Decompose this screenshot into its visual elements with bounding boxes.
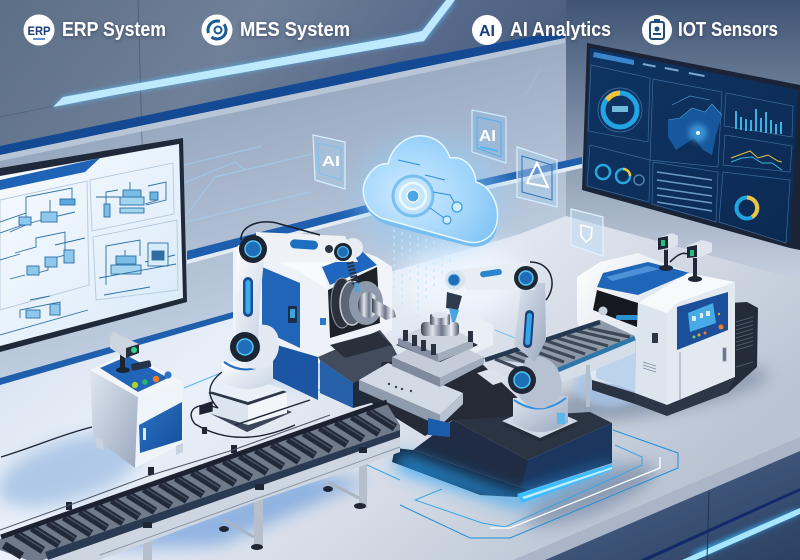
left CNC machine [233, 238, 400, 408]
rear housing [577, 253, 690, 390]
rail brackets [66, 427, 367, 528]
blue under-glow [395, 452, 615, 508]
header: ERP System: ERP [28, 24, 50, 38]
schematic panel: bottom right [93, 220, 178, 300]
cabinet top [638, 273, 735, 313]
right white column [363, 252, 392, 333]
line chart [731, 151, 782, 170]
icon: holographic cloud [363, 136, 498, 247]
right wall [566, 0, 800, 280]
panel frames [587, 65, 793, 243]
machine back body [233, 238, 392, 377]
control box with camera [90, 332, 183, 468]
cloud glow [355, 135, 505, 255]
header: IOT Sensors: IOT Sensors [678, 19, 778, 41]
floor circuit outlines [184, 330, 678, 538]
top face [260, 242, 363, 290]
icon: floating AI tile left [313, 135, 345, 189]
icon: floating alert tile [517, 147, 557, 207]
small gauges [596, 165, 644, 185]
glowing ceiling light strip [53, 0, 455, 107]
cabinet skirt [635, 377, 735, 416]
map chart [668, 96, 722, 155]
black side unit [728, 302, 758, 393]
back wall [0, 0, 800, 400]
cabinet door details [643, 348, 726, 400]
front rail [45, 430, 400, 560]
donut chart lower right [736, 198, 758, 218]
right steel plate [477, 368, 508, 385]
left monitor [0, 138, 187, 352]
lathe spindle [331, 278, 396, 328]
cabinet touchscreen [688, 303, 716, 332]
icon: floating shield tile [571, 209, 603, 256]
rollers [4, 411, 395, 556]
stacked fixture block lower [392, 335, 484, 378]
header: MES System [202, 14, 350, 46]
camera one [658, 233, 678, 271]
schematic panel: top left [0, 181, 89, 310]
chuck [421, 322, 459, 336]
dashboard title [593, 52, 634, 65]
header: AI Analytics [472, 15, 611, 45]
left robot arm [207, 222, 363, 432]
icon: floating AI tile right [472, 110, 506, 163]
cabinet blue panel [677, 292, 728, 350]
header: ERP System [24, 14, 166, 46]
rail posts and legs [143, 450, 367, 560]
header: AI Analytics: AI Analytics [510, 19, 611, 41]
wall accent stripes [0, 30, 582, 264]
right robot platform [392, 412, 615, 508]
wall base stripe [0, 312, 233, 385]
cables [1, 372, 310, 457]
sensor cameras [658, 233, 712, 282]
bar chart [735, 109, 782, 134]
cabinet door [139, 402, 182, 453]
table shadows and light pools [0, 240, 772, 550]
lower blue front [270, 343, 318, 400]
table surface [0, 216, 800, 560]
right monitor [582, 43, 800, 250]
circuit lines on wall [184, 70, 540, 222]
cabinet front [667, 282, 735, 405]
data table [657, 172, 712, 211]
cabinet buttons [692, 313, 724, 338]
data rain lines [394, 222, 450, 320]
machine bed [318, 330, 400, 383]
table front edge with light strip [513, 437, 800, 560]
steel slab [359, 363, 463, 415]
panel buttons [132, 371, 172, 388]
icon: floating AI tile left: AI [322, 153, 340, 170]
monitor header bar [0, 158, 100, 190]
forearm [256, 232, 358, 262]
front roller conveyor [0, 402, 400, 560]
sensor camera on box [110, 332, 139, 373]
header: IOT Sensors [642, 15, 778, 45]
camera two [670, 240, 712, 282]
machine control panel [288, 306, 297, 323]
right robot arm [445, 262, 578, 442]
donut gauge [598, 88, 642, 132]
right cabinet machine [577, 253, 758, 416]
white block behind chuck [457, 315, 493, 353]
stacked fixture block upper [398, 320, 473, 354]
schematic panel: top right [90, 163, 174, 231]
dark slide rails [370, 362, 520, 436]
icon: floating AI tile right: AI [479, 128, 496, 145]
header: ERP System: ERP System [62, 19, 166, 41]
schematic panel: bottom left [0, 296, 88, 335]
blue panel [262, 267, 300, 348]
header: MES System: MES System [240, 19, 350, 41]
dark machine bay [328, 267, 380, 338]
cabinet left face [635, 303, 667, 405]
blue top [322, 252, 377, 285]
forearm [454, 262, 535, 290]
back conveyor [485, 320, 635, 407]
central fixture and slide table [359, 312, 520, 436]
cloud circuit core [393, 160, 462, 224]
white column [300, 272, 328, 357]
dashboard nav [643, 63, 705, 77]
header: AI Analytics: AI [479, 23, 495, 40]
back rail [1, 402, 387, 537]
